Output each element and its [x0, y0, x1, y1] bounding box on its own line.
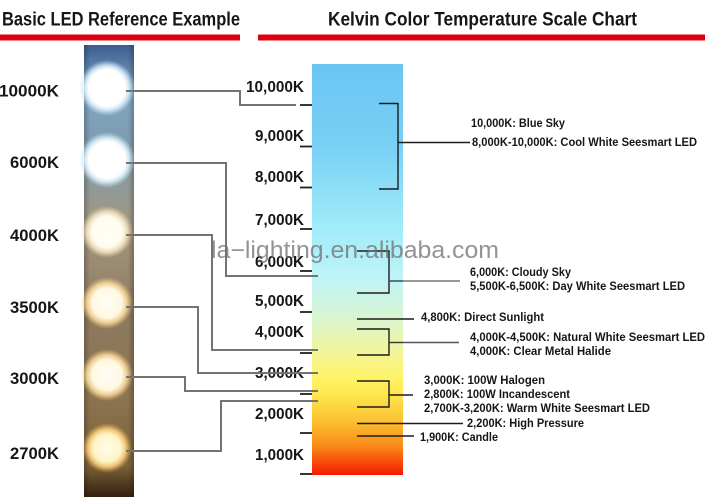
heading underline left [0, 34, 240, 40]
annotation: blue sky and cool white: 8,000K-10,000K: Cool White Seesmart LED [472, 136, 697, 149]
LED temperature labels: 4000K [10, 226, 60, 245]
bracket: warm white range [357, 381, 413, 407]
LED temperature labels: 10000K [0, 82, 60, 100]
LED 3500K [81, 277, 133, 329]
annotation: candle: 1,900K: Candle [420, 431, 499, 444]
scale axis labels [246, 79, 304, 464]
scale axis labels: 4,000K [255, 324, 304, 341]
bracket: natural white range [357, 329, 459, 355]
line: high pressure [357, 422, 463, 424]
scale axis labels: 8,000K [255, 169, 304, 186]
LED 4000K [81, 206, 133, 258]
line: direct sunlight [357, 318, 414, 320]
annotation: cloudy sky and day white: 6,000K: Cloudy Sky [470, 266, 572, 279]
annotation: natural white and metal halide: 4,000K-4,500K: Natural White Seesmart LED [470, 331, 705, 344]
annotation: cloudy sky and day white [470, 266, 685, 293]
LED temperature labels: 6000K [10, 153, 60, 172]
scale tick marks [300, 105, 312, 474]
annotation: natural white and metal halide: 4,000K: Clear Metal Halide [470, 345, 612, 358]
bracket: cool white range [379, 104, 470, 189]
LED 10000K [79, 60, 135, 116]
LED temperature labels: 3000K [10, 369, 60, 388]
annotation: halogen, incandescent and warm white: 2,700K-3,200K: Warm White Seesmart LED [424, 402, 650, 415]
heading: Basic LED Reference Example: Basic LED Reference Example [2, 10, 240, 30]
connector lines from LEDs to scale [126, 91, 318, 451]
watermark: la−lighting.en.alibaba.com [211, 237, 499, 264]
annotation: natural white and metal halide [470, 331, 705, 358]
line: candle [357, 435, 414, 437]
heading underline right [258, 34, 705, 40]
LED temperature labels: 2700K [10, 444, 60, 463]
LED 2700K [82, 423, 132, 473]
scale axis labels: 6,000K [255, 254, 304, 271]
bracket: day white range [357, 251, 460, 293]
annotation: direct sunlight: 4,800K: Direct Sunlight [421, 311, 544, 324]
annotation: cloudy sky and day white: 5,500K-6,500K: Day White Seesmart LED [470, 280, 685, 293]
scale axis labels: 9,000K [255, 128, 304, 145]
heading: Kelvin Color Temperature Scale Chart: Kelvin Color Temperature Scale Chart [328, 10, 638, 30]
LED 3000K [81, 349, 133, 401]
annotation: halogen, incandescent and warm white: 3,000K: 100W Halogen [424, 374, 545, 387]
Kelvin colour scale bar [312, 64, 403, 475]
scale axis labels: 7,000K [255, 212, 304, 229]
annotation: halogen, incandescent and warm white: 2,800K: 100W Incandescent [424, 388, 570, 401]
annotation: blue sky and cool white [471, 117, 697, 149]
LED temperature labels [0, 82, 60, 463]
scale axis labels: 2,000K [255, 406, 304, 423]
LED 6000K [79, 132, 135, 188]
annotation: halogen, incandescent and warm white [424, 374, 650, 415]
annotation: blue sky and cool white: 10,000K: Blue Sky [471, 117, 566, 130]
scale axis labels: 1,000K [255, 447, 304, 464]
scale axis labels: 10,000K [246, 79, 304, 96]
LED strip photo [79, 45, 135, 497]
annotation: high pressure: 2,200K: High Pressure [467, 417, 585, 430]
LED temperature labels: 3500K [10, 298, 60, 317]
scale axis labels: 5,000K [255, 293, 304, 310]
scale axis labels: 3,000K [255, 365, 304, 382]
